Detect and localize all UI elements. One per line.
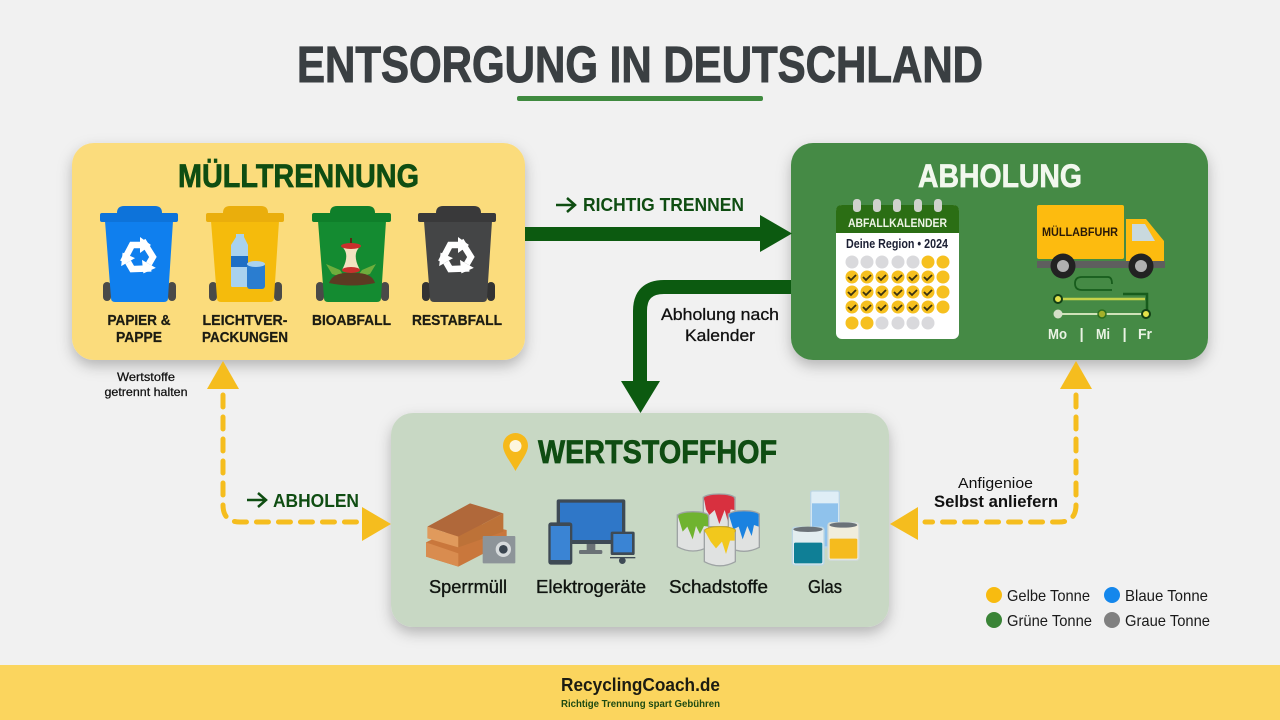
icon: black bin bbox=[418, 206, 496, 302]
icon: glass jars bbox=[792, 491, 859, 565]
pickup days bbox=[1048, 326, 1152, 343]
item labels: Elektrogeräte bbox=[536, 577, 646, 597]
item labels: Glas bbox=[808, 577, 842, 597]
bin labels: PAPIER & bbox=[108, 312, 171, 329]
arrow: dashed left bbox=[207, 361, 391, 541]
icon: calendar bbox=[836, 199, 959, 339]
pickup days: | bbox=[1080, 326, 1084, 343]
legend: Grüne Tonne bbox=[1007, 613, 1092, 630]
icon: wood and appliance bbox=[426, 503, 515, 567]
icon: green bin bbox=[312, 206, 391, 302]
panel: Mülltrennung bbox=[72, 143, 525, 360]
heading: Abholung: ABHOLUNG bbox=[918, 158, 1082, 194]
panel: Abholung bbox=[791, 143, 1208, 360]
label: Selbst anliefern: Anfigenioe bbox=[958, 475, 1033, 492]
note: Wertstoffe getrennt halten: Wertstoffe bbox=[117, 370, 175, 384]
arrow: Abholung to Wertstoffhof bbox=[621, 287, 791, 413]
icon: blue bin bbox=[100, 206, 178, 302]
bin labels bbox=[108, 312, 502, 346]
label: abholen: ABHOLEN bbox=[273, 491, 359, 511]
route diagram bbox=[1054, 277, 1150, 318]
legend: Gelbe Tonne bbox=[1007, 588, 1090, 605]
item labels: Sperrmüll bbox=[429, 577, 507, 597]
footer tagline: Richtige Trennung spart Gebühren bbox=[561, 699, 720, 710]
note: Wertstoffe getrennt halten bbox=[104, 370, 188, 399]
heading: Wertstoffhof: WERTSTOFFHOF bbox=[538, 434, 777, 470]
arrow: dashed right bbox=[890, 361, 1092, 540]
pickup days: Mo bbox=[1048, 326, 1067, 343]
bin labels: LEICHTVER- bbox=[202, 312, 288, 329]
note: Wertstoffe getrennt halten: getrennt halten bbox=[104, 385, 188, 399]
icon: yellow bin bbox=[206, 206, 284, 302]
label: richtig trennen: RICHTIG TRENNEN bbox=[583, 195, 744, 215]
footer brand: RecyclingCoach.de bbox=[561, 675, 720, 695]
bin labels: PAPPE bbox=[116, 329, 162, 346]
pickup days: Mi bbox=[1096, 326, 1110, 343]
label: Abholung nach Kalender: Kalender bbox=[685, 326, 755, 345]
icon: truck: MÜLLABFUHR bbox=[1042, 226, 1119, 239]
footer bbox=[0, 665, 1280, 720]
icon: electronics bbox=[548, 499, 635, 565]
legend: Blaue Tonne bbox=[1125, 588, 1208, 605]
label: Abholung nach Kalender: Abholung nach bbox=[661, 305, 779, 324]
title underline bbox=[517, 96, 763, 101]
label: Abholung nach Kalender bbox=[661, 305, 779, 345]
icon: calendar: ABFALLKALENDER bbox=[848, 218, 948, 230]
bin labels: BIOABFALL bbox=[312, 312, 391, 329]
icon: location pin bbox=[503, 433, 528, 471]
icon: paint cans bbox=[677, 494, 759, 566]
arrow: Mülltrennung to Abholung bbox=[525, 215, 792, 252]
legend bbox=[986, 587, 1210, 630]
label: Selbst anliefern bbox=[934, 475, 1058, 511]
item labels: Schadstoffe bbox=[669, 577, 768, 597]
legend: Graue Tonne bbox=[1125, 613, 1210, 630]
icon: calendar: Deine Region • 2024 bbox=[846, 237, 948, 251]
pickup days: Fr bbox=[1138, 326, 1152, 343]
bin labels: PACKUNGEN bbox=[202, 329, 288, 346]
heading: Mülltrennung: MÜLLTRENNUNG bbox=[178, 158, 419, 194]
pickup days: | bbox=[1122, 326, 1127, 343]
icon: truck bbox=[1037, 205, 1165, 278]
bin labels: RESTABFALL bbox=[412, 312, 502, 329]
label: Selbst anliefern: Selbst anliefern bbox=[934, 492, 1058, 511]
title: ENTSORGUNG IN DEUTSCHLAND bbox=[297, 36, 983, 93]
item labels bbox=[429, 577, 842, 597]
panel: Wertstoffhof bbox=[391, 413, 889, 627]
